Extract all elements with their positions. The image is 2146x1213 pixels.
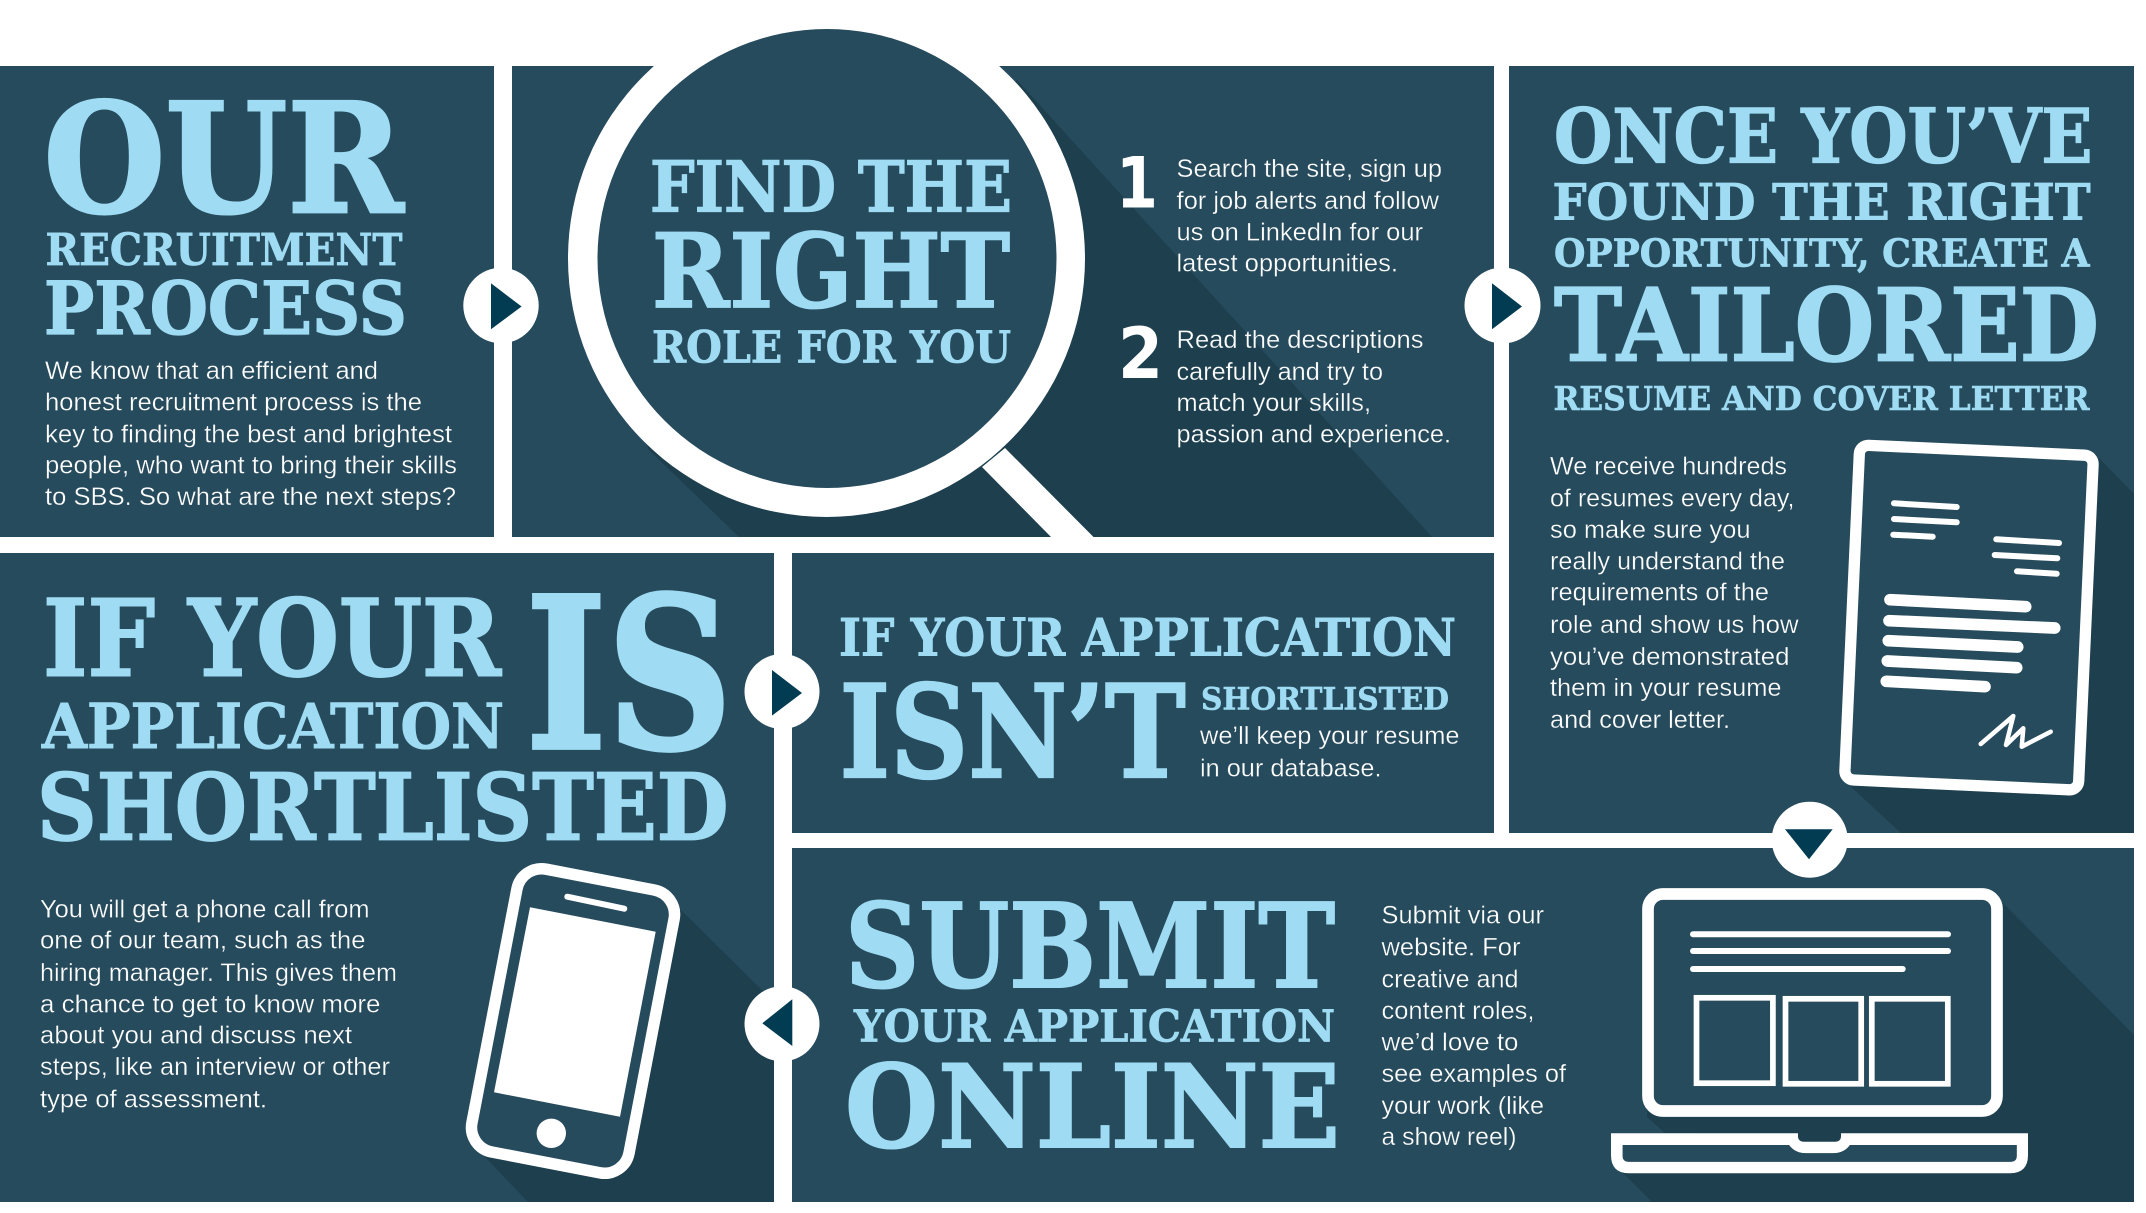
heading: if your application isn't shortlisted: SHORTLISTED [1201,682,1449,718]
text block: phone call: hiring manager. This gives them [40,959,397,987]
text block: resume advice: them in your resume [1550,674,1782,702]
heading: if your application isn't shortlisted [839,608,1456,808]
heading: our recruitment process [44,69,407,352]
step 2: 2 [1118,313,1163,395]
text block: submit via website: see examples of [1382,1060,1566,1088]
heading: submit your application online: SUBMIT [845,879,1335,1015]
text block: submit via website: your work (like [1382,1092,1544,1120]
text block: phone call: steps, like an interview or other [40,1053,390,1081]
step 2: match your skills, [1176,389,1371,417]
heading: once you've found the right opportunity: OPPORTUNITY, CREATE A [1554,230,2090,276]
text block: resume advice: We receive hundreds [1550,452,1787,480]
text block: submit via website: a show reel) [1382,1123,1516,1151]
panel: submit your application online [792,848,2134,1202]
text block: phone call: a chance to get to know more [40,990,381,1018]
text block: resume advice: role and show us how [1550,611,1799,639]
heading: find the right role for you: RIGHT [652,212,1010,332]
icon: resume document [1845,445,2093,790]
heading: once you've found the right opportunity: ONCE YOU’VE [1554,92,2092,180]
text block: submit via website [1380,902,1566,1151]
text block: introduction: to SBS. So what are the next steps? [45,483,456,511]
arrow: intro to find the right role [463,268,539,343]
text block: introduction: We know that an efficient and [45,357,378,385]
step 1: us on LinkedIn for our [1176,218,1423,246]
icon: laptop [1611,894,2028,1173]
text block: introduction [45,357,457,511]
step 2: passion and experience. [1176,420,1451,448]
text block: database: we’ll keep your resume [1199,722,1460,750]
heading: if your application is shortlisted: APPLICATION [41,690,504,763]
arrow: find the right role to tailored resume [1464,268,1540,344]
heading: once you've found the right opportunity: TAILORED [1554,266,2099,384]
heading: if your application is shortlisted: IS [526,551,732,798]
text block: submit via website: creative and [1382,966,1518,994]
panel: tailored resume and cover letter [1509,66,2134,833]
text block: submit via website: website. For [1380,934,1520,962]
icon: magnifying glass [568,0,1094,537]
text block: phone call: about you and discuss next [40,1022,352,1050]
heading: submit your application online: YOUR APPLICATION [853,1002,1335,1052]
text block: submit via website: Submit via our [1382,902,1544,930]
heading: our recruitment process: OUR [44,69,405,248]
heading: once you've found the right opportunity: FOUND THE RIGHT [1552,172,2090,232]
text block: resume advice: and cover letter. [1550,706,1730,734]
panel: find the right role [512,0,1494,537]
panel: our recruitment process [0,66,494,537]
step 1: Search the site, sign up [1176,155,1442,183]
text block: resume advice: so make sure you [1550,516,1750,544]
heading: once you've found the right opportunity: RESUME AND COVER LETTER [1554,379,2090,418]
icon: smartphone [467,864,679,1178]
step 1: 1 [1116,142,1158,224]
text block: introduction: key to finding the best and brightest [45,420,452,448]
heading: our recruitment process: RECRUITMENT [46,225,403,276]
text block: phone call: You will get a phone call from [40,896,370,924]
text block: submit via website: content roles, [1382,997,1534,1025]
heading: if your application is shortlisted: IF YOUR [43,576,502,700]
step 1 [1116,142,1442,278]
step 2 [1118,313,1451,448]
text block: introduction: people, who want to bring their skills [45,452,457,480]
text block: database: in our database. [1200,754,1382,782]
step 2: Read the descriptions [1176,326,1424,354]
text block: submit via website: we’d love to [1380,1028,1518,1056]
text block: phone call [40,896,397,1114]
text block: resume advice: really understand the [1550,548,1785,576]
step 1: latest opportunities. [1176,250,1398,278]
heading: find the right role for you [650,146,1012,374]
heading: if your application isn't shortlisted: ISN’T [840,658,1186,808]
heading: if your application isn't shortlisted: IF YOUR APPLICATION [839,608,1456,668]
heading: find the right role for you: FIND THE [650,146,1012,228]
arrow: tailored resume to submit [1772,802,1848,878]
arrow: shortlisted to not shortlisted [744,654,820,729]
heading: once you've found the right opportunity [1552,92,2099,418]
heading: submit your application online: ONLINE [845,1040,1340,1174]
text block: phone call: one of our team, such as the [40,926,366,954]
heading: our recruitment process: PROCESS [44,266,407,352]
text block: database [1199,722,1460,782]
heading: find the right role for you: ROLE FOR YOU [652,322,1011,374]
arrow: submit to shortlisted [744,986,820,1061]
text block: resume advice: you’ve demonstrated [1550,643,1790,671]
heading: if your application is shortlisted: SHORTLISTED [37,754,728,862]
text block: introduction: honest recruitment process is the [45,388,422,416]
text block: resume advice: of resumes every day, [1550,484,1794,512]
heading: if your application is shortlisted [37,551,732,862]
step 1: for job alerts and follow [1176,187,1440,215]
text block: phone call: type of assessment. [40,1086,267,1114]
text block: resume advice: requirements of the [1550,578,1769,606]
panel: if your application is shortlisted [0,551,774,1202]
step 2: carefully and try to [1176,358,1383,386]
panel: if your application isn't shortlisted [792,553,1494,833]
heading: submit your application online [845,879,1340,1174]
text block: resume advice [1550,452,1799,734]
